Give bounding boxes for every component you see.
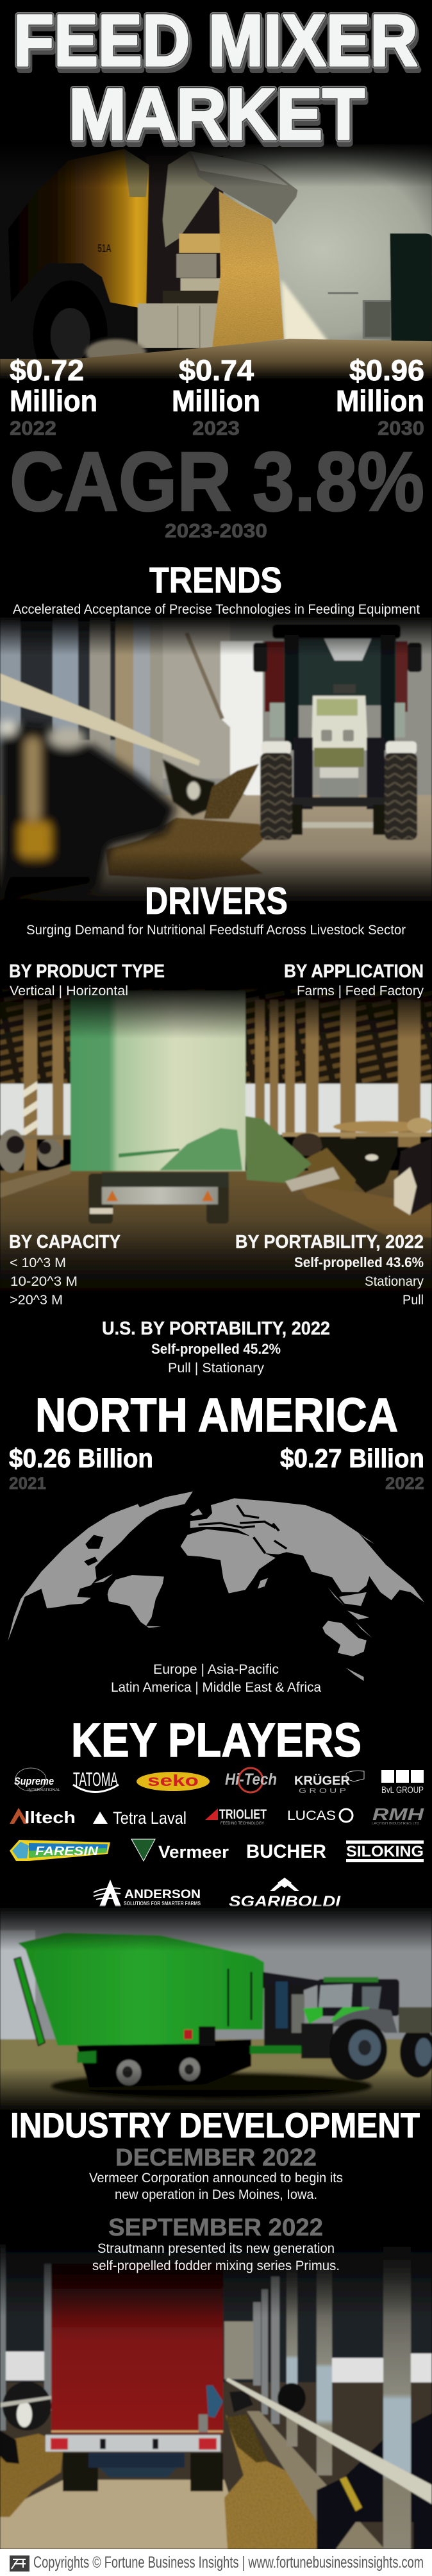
dark bays: [21, 618, 53, 740]
side panels: [270, 703, 405, 737]
warning triangles: [106, 1190, 213, 1201]
wagon chassis: [102, 1172, 229, 1188]
rear opening: [220, 641, 263, 802]
logo: kruger group: [294, 1771, 364, 1795]
shadow on grass: [51, 2073, 372, 2099]
stat: 2030 market size: Million: [336, 384, 424, 417]
pillar: [150, 618, 163, 791]
heading: trends: TRENDS: [149, 560, 282, 601]
logo: hi-tech: [225, 1768, 277, 1792]
logo: alltech: lltech: [24, 1808, 76, 1827]
stat: 2030 market size: [336, 354, 424, 439]
logo: anderson: [94, 1880, 201, 1907]
cab roof: [272, 625, 401, 639]
wagon dark chassis: [77, 2039, 251, 2087]
hub: [51, 308, 90, 363]
rear tyre: [329, 2019, 387, 2080]
loader arm: [163, 151, 215, 248]
tail light right: [199, 2438, 217, 2450]
ceiling beam: [185, 632, 224, 720]
hopper rim: [51, 2430, 223, 2432]
pillar: [0, 618, 21, 746]
tyre right: [385, 753, 417, 840]
grille: [320, 768, 358, 801]
logo: tatoma: TATOMA: [73, 1768, 118, 1790]
stat: 2022 market size: $0.72: [10, 354, 84, 387]
stat: 2022 market size: Million: [10, 384, 97, 417]
barn backdrop: [0, 616, 432, 808]
logo: bvl group: [381, 1770, 424, 1796]
logo: siloking: SILOKING: [346, 1843, 424, 1860]
segment: by portability 2022: Self-propelled 43.6%: [294, 1254, 424, 1270]
logo: alltech: [10, 1808, 76, 1827]
logo: supreme: Supreme: [14, 1775, 54, 1787]
chute plate: [285, 1167, 340, 1191]
bumper slots: [100, 2439, 158, 2449]
segment: by portability 2022: Pull: [403, 1293, 424, 1308]
headlight: [321, 730, 332, 741]
logo: bucher: BUCHER: [246, 1841, 326, 1862]
stat: north america 2022: 2022: [385, 1474, 424, 1493]
logo: lucas g: LUCAS: [287, 1808, 336, 1823]
globe map: [8, 1492, 424, 1681]
mirror left: [253, 643, 267, 672]
dust: [85, 339, 146, 366]
pale gear: [292, 1994, 304, 2033]
screen: [176, 254, 217, 278]
segment: by capacity: < 10^3 M: [10, 1256, 66, 1270]
heading: north america: NORTH AMERICA: [35, 1388, 398, 1442]
dark right panel: [390, 233, 432, 346]
eurasia: [190, 1498, 424, 1603]
wheel hub one: [117, 2060, 141, 2085]
dark bay three: [110, 618, 115, 740]
segment: by portability 2022: Stationary: [365, 1274, 424, 1289]
wagon tyres: [63, 2453, 223, 2491]
stat: north america 2022: $0.27 Billion: [280, 1444, 424, 1473]
red cab side: [396, 641, 408, 712]
right windows: [332, 2358, 383, 2382]
segment: by capacity: [9, 1232, 120, 1308]
rail: [0, 673, 200, 766]
left rail: [0, 2396, 51, 2407]
stat: 2023 market size: [172, 354, 260, 439]
hay left: [0, 2434, 63, 2517]
tail light left: [51, 2438, 68, 2450]
logo: sgariboldi: SGARIBOLDI: [229, 1893, 342, 1910]
event: december 2022: DECEMBER 2022: [115, 2144, 317, 2171]
distant cows: [163, 759, 215, 816]
interior of machine: [146, 156, 223, 307]
right cows back: [278, 2383, 306, 2414]
segment: by portability 2022: [235, 1232, 424, 1308]
green chassis beam: [77, 2051, 96, 2063]
beam front: [250, 2046, 304, 2054]
event: december 2022: Vermeer Corporation announced to begin its: [89, 2171, 343, 2185]
segment: by capacity: 10-20^3 M: [10, 1274, 78, 1289]
grain mound: [0, 339, 432, 380]
stat: 2023 market size: $0.74: [179, 354, 254, 387]
grass: [0, 2039, 432, 2111]
event: september 2022: Strautmann presented its new generation: [97, 2241, 335, 2256]
south america: [108, 1575, 164, 1628]
logo: faresin: [10, 1840, 110, 1861]
green bar on tank: [119, 1149, 179, 1158]
green pile on tank: [160, 1128, 242, 1170]
logo: vermeer: Vermeer: [158, 1842, 229, 1862]
cab glass: [284, 635, 396, 705]
logo: faresin: FARESIN: [35, 1845, 99, 1858]
logos row one: [14, 1768, 424, 1796]
segment: by product type: Vertical | Horizontal: [10, 984, 128, 998]
footer bar: [0, 2549, 432, 2576]
stat: 2023 market size: Million: [172, 384, 260, 417]
photo fade top: [0, 616, 432, 655]
feeding cows near: [229, 2391, 253, 2412]
title outline: [13, 0, 418, 155]
photo fade top: [0, 1906, 432, 1951]
japan: [358, 1533, 375, 1544]
logo: supreme: [14, 1768, 61, 1792]
logo: trioliet: FEEDING TECHNOLOGY: [220, 1822, 264, 1826]
segment: by application: [284, 961, 424, 998]
segment: U.S. by portability 2022: [102, 1318, 330, 1376]
pale hopper box: [138, 303, 219, 348]
logo: anderson: SOLUTIONS FOR SMARTER FARMS: [124, 1901, 201, 1907]
barn columns: [24, 1000, 420, 1173]
roof: [0, 988, 432, 1084]
segment: by product type: [9, 961, 165, 998]
logo: rmh: [372, 1805, 425, 1826]
cab window: [319, 1984, 353, 2007]
title text: [13, 0, 418, 155]
beacon: [333, 684, 356, 693]
engine: [301, 2023, 333, 2058]
logo: kruger group: KRÜGER: [294, 1774, 350, 1788]
title inner ring: [13, 0, 418, 155]
mirror right: [408, 643, 422, 672]
barn dark background: [0, 2238, 432, 2549]
wagon bumper: [102, 1187, 218, 1204]
floor: [0, 1170, 432, 1315]
logo: rmh: RMH: [372, 1805, 425, 1824]
logo: rmh: LACHISH INDUSTRIES LTD.: [372, 1822, 420, 1826]
grille top: [320, 768, 358, 778]
africa: [181, 1529, 276, 1594]
side fittings: [206, 2386, 223, 2418]
cab roof: [324, 1977, 378, 1982]
hopper tank: [71, 991, 245, 1171]
event: september 2022: self-propelled fodder mixing series Primus.: [92, 2259, 340, 2273]
logo: anderson: ANDERSON: [124, 1888, 201, 1901]
stat: 2022 market size: 2022: [10, 417, 56, 439]
yellow machine body: [8, 149, 149, 309]
logo: seko: [137, 1772, 210, 1791]
stat: north america 2021: 2021: [9, 1474, 46, 1493]
hopper lines: [178, 306, 200, 348]
left column two: [44, 2264, 53, 2411]
side pipe: [228, 1969, 251, 2026]
pillar: [53, 618, 78, 746]
front column: [383, 2238, 411, 2549]
hood left: [303, 2007, 322, 2024]
fade over photo top: [0, 142, 432, 187]
icon: fortune business insights logo: [10, 2555, 29, 2572]
cab bright reflection: [324, 638, 372, 661]
stat: north america 2022: [280, 1444, 424, 1493]
lane strip: [303, 822, 373, 828]
fender right: [386, 741, 417, 754]
photo fade top: [0, 984, 432, 1039]
stat: 2022 market size: [10, 354, 97, 439]
logo: lucas g: [287, 1808, 353, 1823]
logo: trioliet: TRIOLIET: [219, 1807, 267, 1822]
right trough: [295, 1180, 432, 1238]
inland seas: [199, 1505, 287, 1553]
far right windows: [411, 2353, 432, 2382]
right rail: [282, 1132, 432, 1137]
stat: north america 2021: [9, 1444, 153, 1493]
CAGR period: 2023-2030: [165, 519, 267, 542]
wall backdrop: [0, 144, 432, 362]
left windows: [6, 2352, 44, 2380]
other regions list: Latin America | Middle East & Africa: [111, 1680, 321, 1695]
logo: vermeer: [131, 1839, 229, 1862]
photo fade bottom: [0, 2068, 432, 2112]
tractor: [253, 625, 422, 840]
marquee roof: [263, 1972, 327, 1991]
new zealand: [346, 1668, 364, 1681]
logo: sgariboldi: [229, 1878, 342, 1910]
left cows: [0, 1129, 63, 1173]
british isles: [190, 1508, 203, 1516]
stat: 2030 market size: $0.96: [349, 354, 424, 387]
photo: green mixer wagon in barn: [0, 984, 432, 1318]
sky: [0, 1065, 432, 1135]
madagascar: [258, 1578, 268, 1588]
feed stream: [204, 764, 259, 819]
red plate: [184, 2030, 192, 2039]
logo: tetra laval: Tetra Laval: [113, 1808, 187, 1828]
yellow window: [179, 233, 220, 253]
column: [317, 2251, 332, 2475]
left column: [0, 2244, 6, 2430]
model mark: 51A: [97, 242, 112, 255]
axle tank: [88, 2453, 185, 2468]
discharge chute: [190, 151, 297, 224]
hudson bay: [85, 1535, 103, 1549]
photo: feed mixer unloading grain: [0, 144, 432, 388]
hood window: [317, 699, 358, 716]
hay right: [224, 2414, 333, 2549]
event: september 2022: SEPTEMBER 2022: [108, 2214, 323, 2241]
title inner ring: MARKET: [69, 74, 365, 155]
other regions list: [111, 1662, 321, 1695]
logo: trioliet: [205, 1807, 267, 1826]
fender left: [262, 741, 291, 754]
segment: by product type: BY PRODUCT TYPE: [9, 961, 165, 982]
logo: supreme: INTERNATIONAL: [28, 1789, 61, 1792]
tractor: [301, 1977, 432, 2080]
dark recess: [163, 291, 220, 303]
dark bay two: [78, 618, 90, 740]
other regions list: Europe | Asia-Pacific: [153, 1662, 279, 1677]
feed chute: [244, 1116, 312, 1183]
segment: U.S. by portability 2022: Pull | Stationary: [168, 1361, 265, 1376]
wheel center one: [122, 2066, 133, 2078]
stat: 2023 market size: 2023: [192, 417, 240, 439]
center light: [224, 2321, 256, 2379]
heading: key players: KEY PLAYERS: [71, 1713, 361, 1767]
cab: [317, 1979, 399, 2016]
rear hub: [349, 2030, 381, 2066]
title outline: MARKET: [69, 74, 365, 155]
back floor: [0, 795, 432, 904]
photo: green mixer wagon with tractor: [0, 1906, 432, 2112]
ear tag: [340, 2477, 362, 2511]
wagon rear wheels: [88, 1174, 229, 1224]
tyre left: [260, 753, 292, 840]
photo fade bottom: [0, 1218, 432, 1318]
stat: north america 2021: $0.26 Billion: [9, 1444, 153, 1473]
red hopper: [51, 2264, 223, 2434]
event: september 2022: [92, 2214, 340, 2273]
cab side window: [362, 1987, 381, 2010]
hitch machinery: [264, 1985, 304, 2046]
segment: by application: Farms | Feed Factory: [297, 984, 424, 998]
wheel center two: [185, 2064, 194, 2075]
crowd strip: [399, 2007, 432, 2033]
segment: U.S. by portability 2022: U.S. BY PORTABILITY, 2022: [102, 1318, 330, 1339]
photo fade bottom: [0, 850, 432, 904]
curb: [247, 2411, 385, 2549]
logos row four: [94, 1878, 342, 1910]
concrete path: [0, 2480, 247, 2549]
lower plate: [181, 278, 220, 291]
left rail and trough: [0, 1135, 71, 1198]
caribbean arc: [94, 1574, 113, 1583]
photo: tractor unloading feed in barn: [0, 616, 432, 904]
heading: drivers: DRIVERS: [145, 880, 288, 922]
blue panel: [276, 1982, 288, 2028]
chute top: [190, 151, 288, 185]
rusty pillar: [90, 618, 110, 785]
sky: [0, 1908, 432, 2046]
hub center: [358, 2040, 371, 2055]
axle: [288, 797, 391, 807]
bright backdrop left: [0, 1930, 35, 2041]
pillar: [133, 618, 150, 791]
stripes on column: [24, 1081, 37, 1136]
logos row two: [10, 1805, 425, 1828]
second tyre: [400, 2026, 432, 2078]
logo: kruger group: G R O U P: [299, 1787, 346, 1795]
event: december 2022: [89, 2144, 343, 2202]
cab pillars: [285, 635, 395, 750]
headlight: [343, 730, 354, 741]
column: [287, 2264, 297, 2446]
logos row three: [10, 1839, 424, 1862]
far columns: [253, 2277, 279, 2424]
rear wheels: [292, 805, 385, 835]
wagon hopper: [18, 1933, 264, 2046]
title: [13, 0, 420, 159]
title text: MARKET: [69, 74, 365, 155]
barn rail: [226, 2378, 432, 2504]
pale upper strip: [124, 149, 149, 197]
wheel hub two: [179, 2058, 200, 2081]
drivers statement: Surging Demand for Nutritional Feedstuff Across Livestock Sector: [26, 923, 406, 938]
greenland: [139, 1492, 193, 1518]
photo fade top: [0, 2237, 432, 2317]
great lakes: [84, 1556, 98, 1566]
far wall: [163, 618, 230, 779]
side box: [199, 2026, 215, 2046]
title shadow: [15, 4, 420, 159]
logo: hi-tech: Hi-Tech: [225, 1771, 277, 1789]
cylinder: [199, 2414, 208, 2432]
tyre: [33, 280, 108, 388]
title shadow: MARKET: [70, 78, 366, 159]
photo: red mixer wagon in dairy barn: [0, 2237, 432, 2549]
olive panel: [314, 748, 364, 767]
wagon bumper: [46, 2435, 220, 2452]
feed in trough: [301, 1148, 356, 1193]
logo: seko: seko: [147, 1772, 199, 1790]
dust spray: [281, 280, 328, 341]
trends statement: Accelerated Acceptance of Precise Technologies in Feeding Equipment: [13, 602, 420, 617]
north america land: [8, 1504, 146, 1642]
falling grain: [212, 191, 284, 348]
red cab sides: [265, 641, 284, 712]
foreground cow: [317, 2413, 432, 2549]
light grey fittings: [328, 293, 392, 338]
segment: by capacity: BY CAPACITY: [9, 1232, 120, 1252]
struts: [294, 737, 385, 809]
segment: by capacity: >20^3 M: [10, 1293, 63, 1308]
event: december 2022: new operation in Des Moines, Iowa.: [115, 2187, 317, 2202]
stat: 2030 market size: 2030: [378, 417, 424, 439]
logo: tatoma: [73, 1768, 119, 1792]
hood right: [331, 2007, 369, 2025]
second hub: [415, 2038, 432, 2066]
rusty pillar: [115, 618, 133, 791]
feed pile: [106, 818, 263, 880]
footer background: [0, 2549, 432, 2576]
segment: by portability 2022: BY PORTABILITY, 2022: [235, 1232, 424, 1252]
barn floor: [0, 2382, 432, 2549]
australia: [322, 1621, 367, 1656]
foreground cow: [0, 720, 176, 902]
hood: [312, 696, 368, 750]
ladder side: [14, 1957, 45, 2046]
southeast asia islands: [328, 1588, 372, 1638]
fender: [328, 2009, 397, 2033]
segment: U.S. by portability 2022: Self-propelled 45.2%: [151, 1341, 281, 1357]
hay stream: [226, 2414, 268, 2462]
lower tank: [99, 2468, 176, 2477]
right cows: [292, 1118, 432, 1215]
left cow: [0, 2382, 51, 2464]
